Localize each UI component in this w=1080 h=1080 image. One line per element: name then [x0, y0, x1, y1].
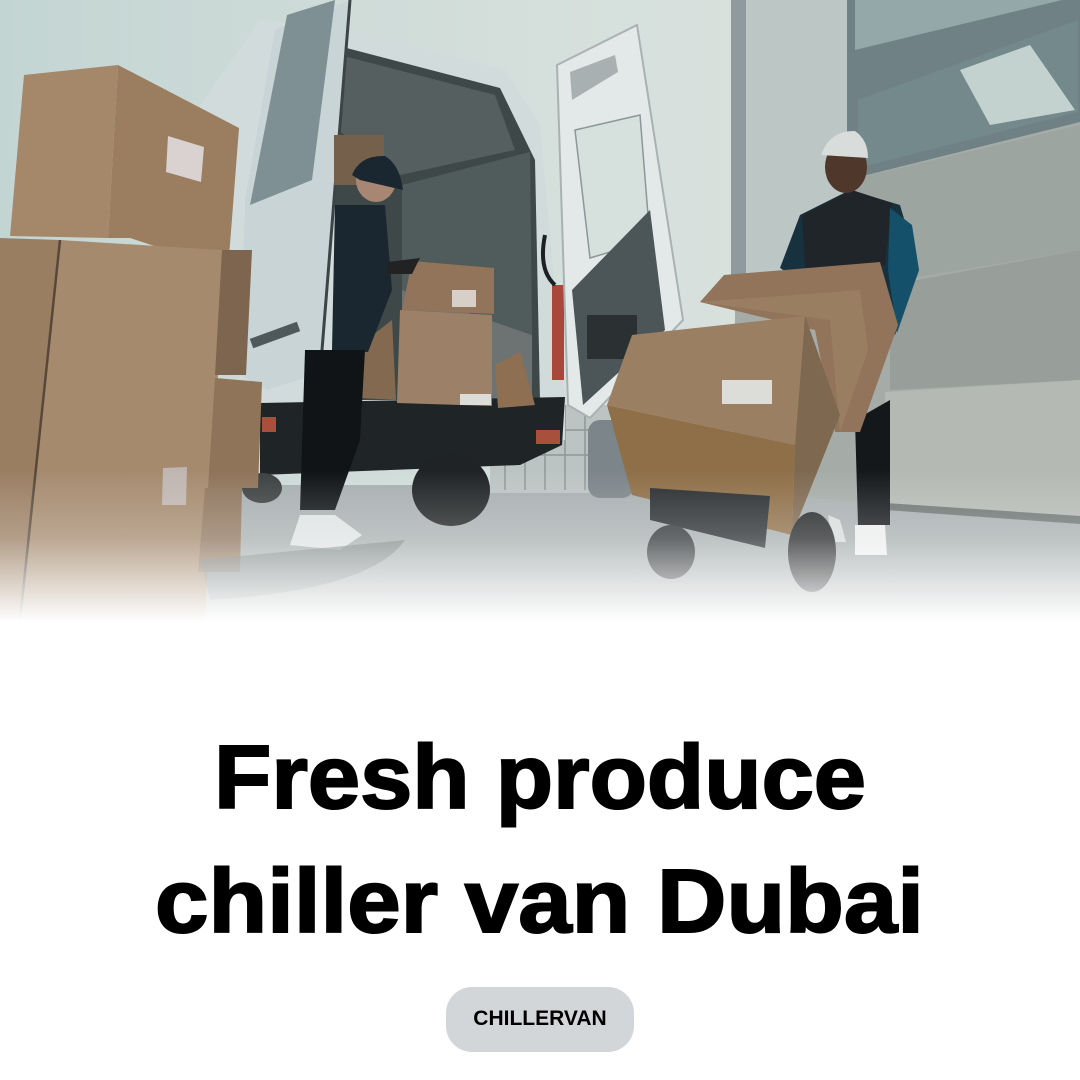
- fence and parked car: [490, 405, 634, 498]
- open right van door: [557, 25, 683, 418]
- title: [155, 728, 924, 952]
- delivery man: [780, 131, 919, 555]
- building facade: [731, 0, 1080, 524]
- ground: [0, 485, 1080, 622]
- white fade at bottom of photo: [0, 470, 1080, 622]
- rear wheels: [412, 454, 490, 526]
- photo: delivery workers loading a van: [0, 0, 1080, 618]
- tag button: [446, 987, 634, 1052]
- sky background: [0, 0, 1080, 622]
- tag button: CHILLERVAN: [473, 1007, 607, 1030]
- open left van door: [240, 0, 350, 390]
- cardboard boxes inside van: [334, 135, 535, 408]
- title line 2: chiller van Dubai: [155, 852, 924, 952]
- stacked boxes on the left: [0, 65, 262, 620]
- van cargo interior: [335, 45, 540, 400]
- van body: [200, 20, 565, 526]
- hand truck with boxes: [607, 262, 898, 592]
- woman with tablet: [290, 156, 420, 550]
- title line 1: Fresh produce: [214, 728, 866, 828]
- shadow on the ground: [200, 540, 405, 600]
- van bumper: [260, 397, 565, 475]
